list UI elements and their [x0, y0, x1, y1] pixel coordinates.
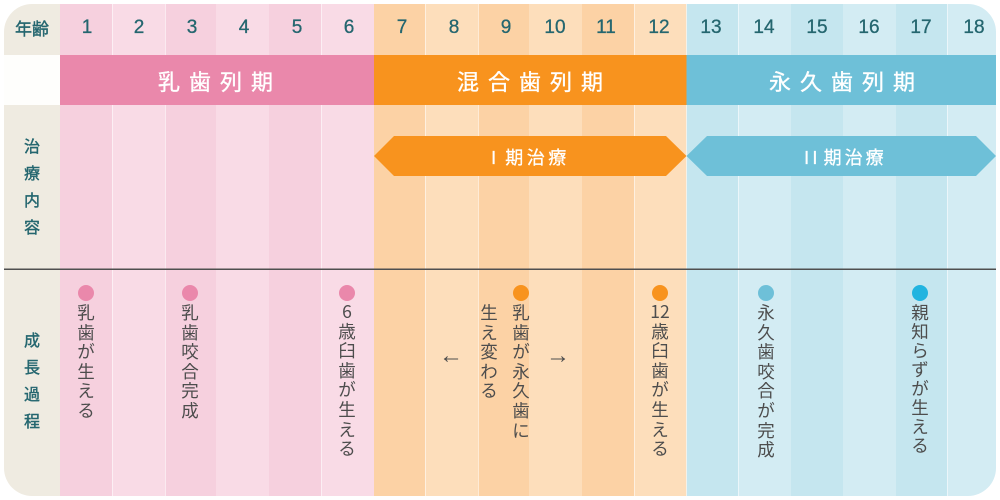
text: 生: [338, 397, 356, 422]
milestone: age 17: [911, 285, 929, 458]
text: が: [338, 377, 356, 402]
side note: teeth change: わ: [480, 359, 498, 384]
age numbers: 7: [397, 17, 407, 38]
age numbers: 10: [544, 17, 566, 38]
milestone: age 9: [512, 285, 530, 443]
arrow label: phase II treatment: II 期治療: [804, 144, 887, 170]
text: 6: [342, 299, 352, 324]
text: 生: [77, 359, 95, 384]
text: 臼: [651, 338, 669, 363]
text: 歯: [512, 320, 530, 345]
text: 完: [757, 418, 775, 443]
text: 臼: [338, 338, 356, 363]
text: る: [338, 436, 356, 461]
row label: treatment: 内: [24, 187, 40, 211]
side note: teeth change: る: [480, 378, 498, 403]
text: 生: [911, 395, 929, 420]
side note: teeth change: 変: [480, 339, 498, 364]
milestone: age 12: [650, 285, 670, 461]
text: 咬: [181, 339, 199, 364]
text: 歯: [181, 320, 199, 345]
text: 知: [911, 319, 929, 344]
text: 合: [181, 359, 199, 384]
text: 永: [757, 300, 775, 325]
text: 永: [512, 359, 530, 384]
text: る: [77, 398, 95, 423]
text: 歯: [338, 358, 356, 383]
age numbers: 5: [292, 17, 302, 38]
text: 歯: [651, 358, 669, 383]
milestone: age 6: [338, 285, 356, 461]
age numbers: 6: [344, 17, 354, 38]
row label: age: 年齢: [15, 15, 49, 40]
text: 12: [650, 299, 670, 324]
text: 歯: [77, 320, 95, 345]
row label: growth process: [24, 327, 40, 432]
row label: treatment: 治: [24, 133, 40, 157]
text: え: [77, 378, 95, 403]
text: え: [651, 417, 669, 442]
age numbers: 11: [596, 17, 616, 38]
text: え: [338, 417, 356, 442]
text: 歳: [338, 319, 356, 344]
text: 生: [651, 397, 669, 422]
row label: growth process: 長: [24, 354, 40, 378]
text: 親: [911, 300, 929, 325]
text: 乳: [77, 300, 95, 325]
text: ら: [911, 338, 929, 363]
row label: treatment: [24, 133, 40, 238]
text: が: [757, 398, 775, 423]
text: る: [651, 436, 669, 461]
age numbers: 9: [501, 17, 511, 38]
age numbers: 2: [134, 17, 144, 38]
text: 成: [181, 398, 199, 423]
text: 完: [181, 378, 199, 403]
age numbers: 17: [910, 17, 932, 38]
text: る: [911, 433, 929, 458]
milestone: age 1: [77, 285, 95, 423]
text: が: [911, 376, 929, 401]
arrow: right: →: [546, 342, 570, 369]
arrow label: phase I treatment: I 期治療: [491, 144, 570, 170]
text: 久: [512, 378, 530, 403]
band heading: primary dentition: 乳歯列期: [158, 65, 282, 97]
age numbers: 16: [858, 17, 880, 38]
age numbers: 12: [648, 17, 670, 38]
age numbers: 3: [187, 17, 197, 38]
age numbers: 8: [449, 17, 459, 38]
side note: teeth change: 生: [480, 300, 498, 325]
text: が: [651, 377, 669, 402]
text: 合: [757, 378, 775, 403]
side note: teeth change: え: [480, 320, 498, 345]
age numbers: 14: [753, 17, 775, 38]
band heading: mixed dentition: 混合歯列期: [457, 65, 612, 97]
row label: growth process: 程: [24, 408, 40, 432]
text: 歯: [757, 339, 775, 364]
row label: growth process: 過: [24, 381, 40, 405]
age numbers: [82, 17, 985, 38]
milestone: age 3: [181, 285, 199, 423]
row label: treatment: 療: [24, 160, 40, 184]
text: 歳: [651, 319, 669, 344]
text: 成: [757, 437, 775, 462]
row label: treatment: 容: [24, 214, 40, 238]
text: ず: [911, 357, 929, 382]
side note: teeth change: [480, 300, 498, 403]
text: に: [512, 418, 530, 443]
arrow: left: ←: [439, 342, 463, 369]
age numbers: 18: [963, 17, 985, 38]
text: え: [911, 414, 929, 439]
text: 咬: [757, 359, 775, 384]
text: が: [512, 339, 530, 364]
age numbers: 13: [700, 17, 722, 38]
age numbers: 4: [239, 17, 249, 38]
text: 久: [757, 320, 775, 345]
age numbers: 1: [82, 17, 92, 38]
age numbers: 15: [806, 17, 828, 38]
text: 歯: [512, 398, 530, 423]
milestone: age 14: [757, 285, 775, 462]
row label: growth process: 成: [24, 327, 40, 351]
text: 乳: [512, 300, 530, 325]
band heading: permanent dentition: 永久歯列期: [769, 65, 924, 97]
text: が: [77, 339, 95, 364]
text: 乳: [181, 300, 199, 325]
